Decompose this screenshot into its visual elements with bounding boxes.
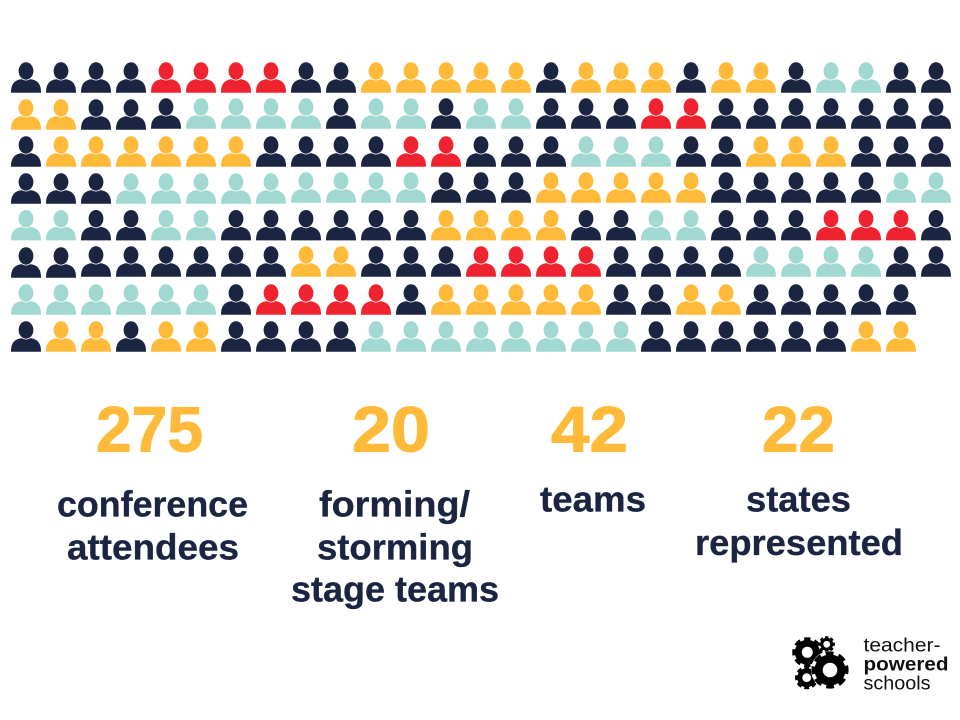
stat: 20 forming/storming stage teams <box>291 394 499 610</box>
stat: 22 states represented <box>695 394 903 563</box>
row 5 of people icons <box>11 209 951 240</box>
row 2 of people icons <box>11 98 951 130</box>
label forming/storming stage teams: storming <box>317 526 473 567</box>
stat: 275 conference attendees <box>57 394 248 567</box>
label states represented: states <box>746 479 851 520</box>
logo wordmark: teacher- <box>864 636 940 656</box>
logo wordmark: powered <box>864 654 948 676</box>
number 22: 22 <box>762 394 835 466</box>
label conference attendees: attendees <box>67 526 239 567</box>
label forming/storming stage teams: stage teams <box>291 569 499 610</box>
label forming/storming stage teams: forming/ <box>319 484 470 525</box>
row 4 of people icons <box>11 172 951 204</box>
label conference attendees: conference <box>57 484 248 525</box>
label teams: teams <box>540 479 646 520</box>
row 3 of people icons <box>11 136 951 167</box>
stat: 42 teams <box>540 394 646 520</box>
logo wordmark: schools <box>864 674 930 694</box>
label states represented: represented <box>695 522 903 563</box>
row 1 of people icons <box>11 62 951 93</box>
icon: gears <box>794 637 849 689</box>
row 7 of people icons <box>11 284 916 315</box>
number 275: 275 <box>96 394 203 466</box>
logo: teacher-powered schools <box>794 636 948 694</box>
number 42: 42 <box>551 394 628 466</box>
row 8 of people icons <box>11 320 916 352</box>
people pictogram grid <box>11 62 951 352</box>
number 20: 20 <box>352 394 430 466</box>
row 6 of people icons <box>11 246 951 278</box>
